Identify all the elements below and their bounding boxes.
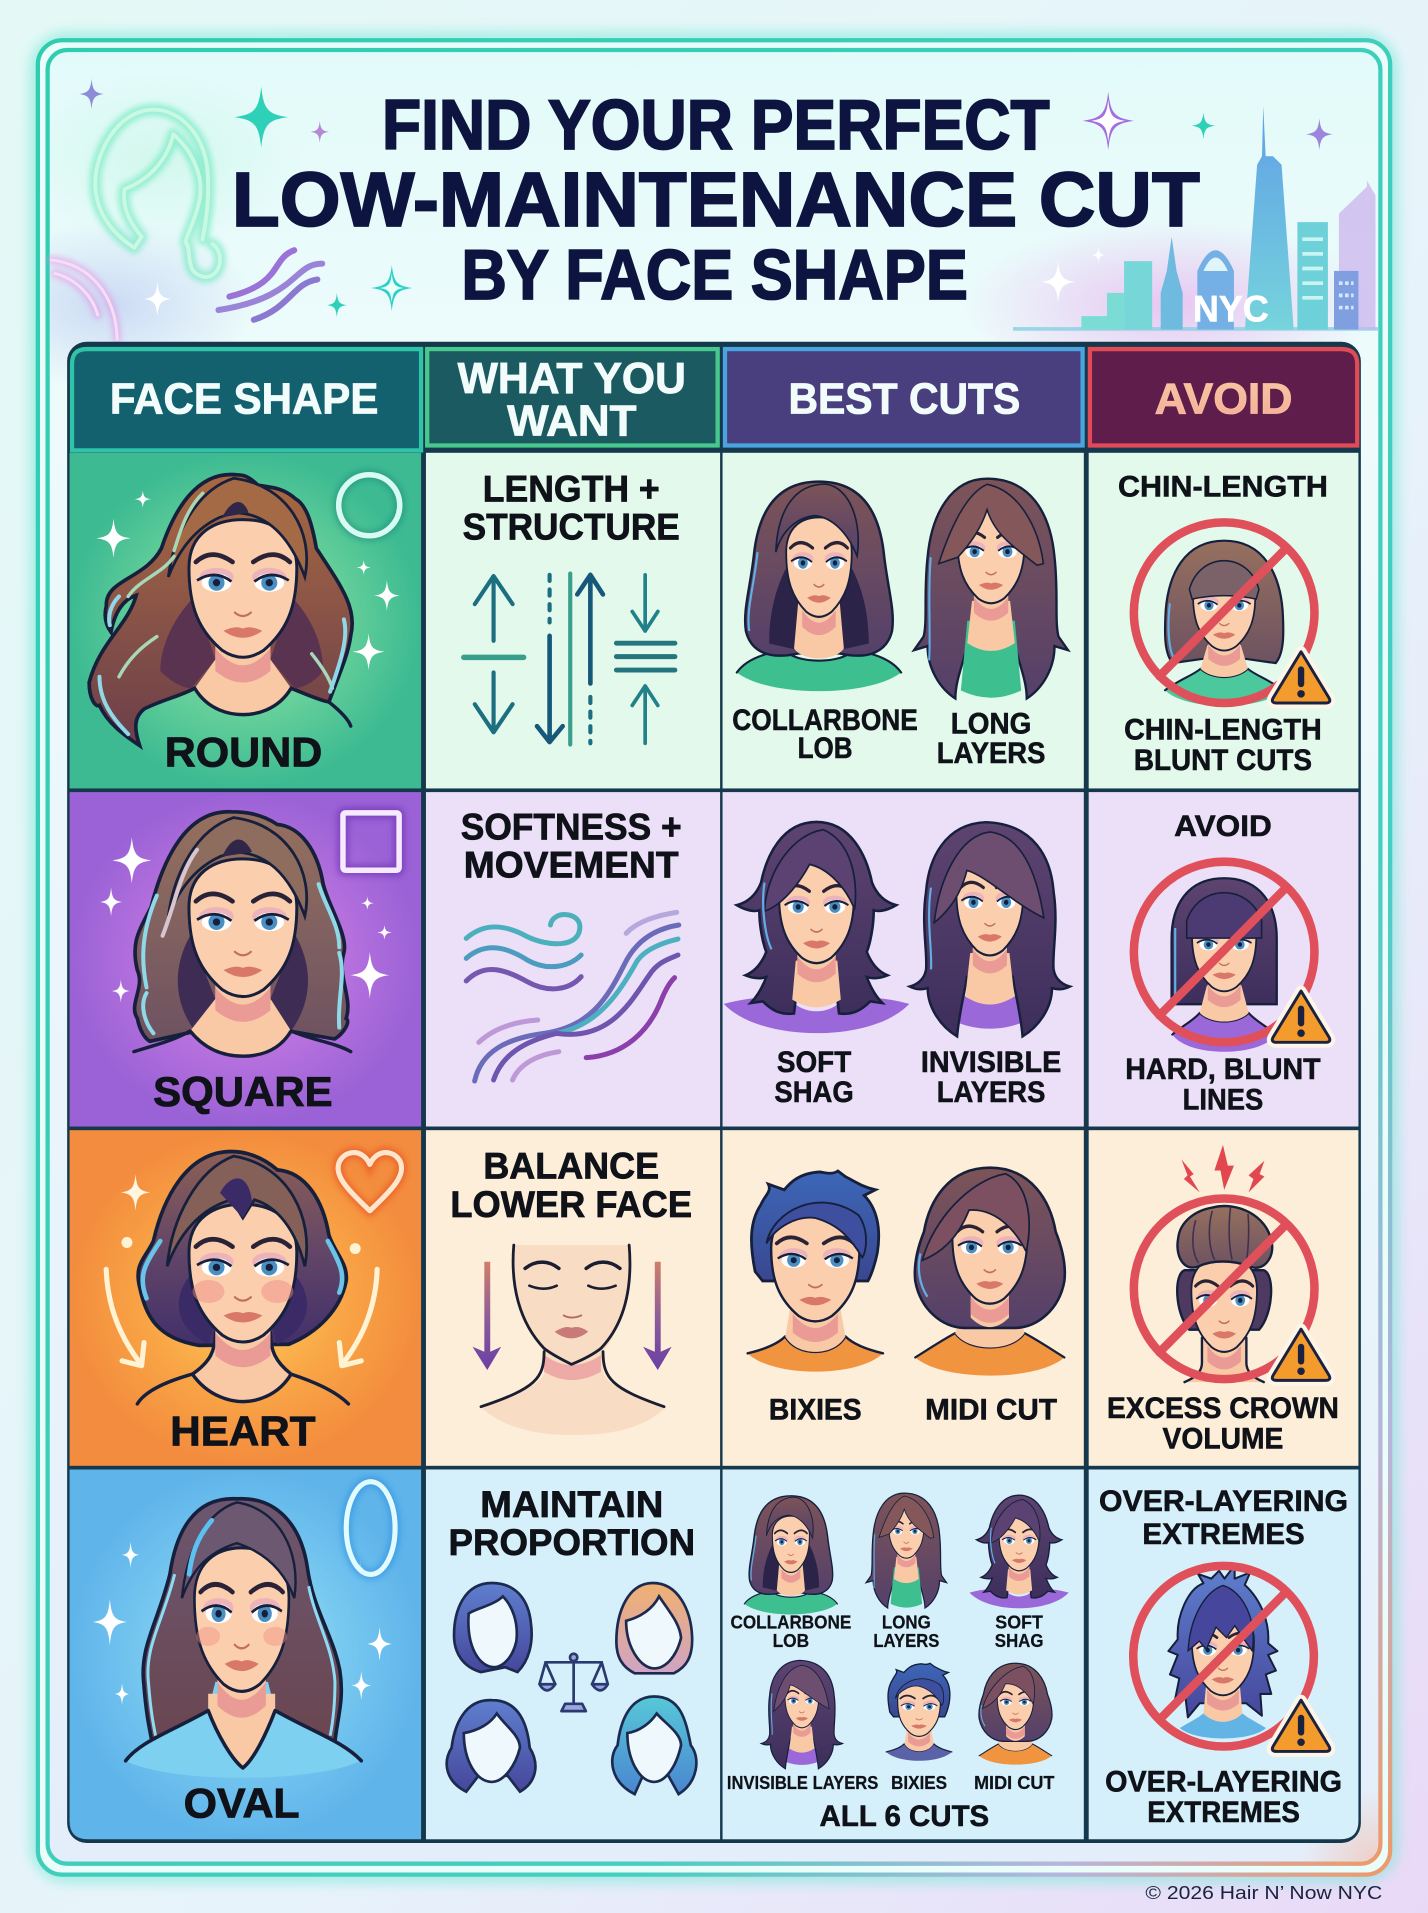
avatar: round face: [89, 474, 352, 746]
sparkles: square: [100, 837, 392, 1003]
avoid icon: hard blunt bob: [1134, 862, 1330, 1052]
avoid heading: over-layering extremes: [1099, 1485, 1348, 1551]
icon: heart shape: [338, 1153, 402, 1211]
avoid icon: over-layered shag: [1133, 1565, 1330, 1751]
icon: four silhouettes with scales: [447, 1583, 696, 1794]
labels: cut names: [727, 1612, 1055, 1793]
icon: length and structure arrows: [464, 574, 675, 745]
header: avoid: [1090, 349, 1357, 445]
cut: soft shag: [724, 822, 909, 1033]
title: [232, 85, 1200, 314]
header: best cuts: [725, 349, 1083, 445]
icon: hair wave squiggles: [218, 250, 322, 320]
table frame: [67, 342, 1361, 1843]
column 2 heading: maintain proportion: MAINTAIN: [480, 1484, 663, 1525]
avoid heading: over-layering extremes: OVER-LAYERING: [1099, 1485, 1348, 1518]
label: soft shag: SOFT: [777, 1046, 851, 1079]
label: round: ROUND: [165, 728, 322, 775]
header: what you want: WHAT YOU: [458, 354, 686, 403]
avoid heading: over-layering extremes: EXTREMES: [1142, 1518, 1305, 1551]
icon: wind swirls: [466, 912, 679, 1081]
label: bixies: BIXIES: [769, 1393, 862, 1426]
label: chin-length blunt cuts: BLUNT CUTS: [1134, 744, 1312, 777]
avatar: square face: [134, 812, 351, 1056]
cut: collarbone lob: [737, 482, 901, 691]
header: face shape: [72, 349, 421, 450]
title: LOW-MAINTENANCE CUT: [232, 157, 1200, 243]
sparkles and arrows: heart: [106, 1174, 377, 1366]
label: excess crown volume: [1107, 1392, 1339, 1456]
avoid icon: excess crown volume: [1134, 1199, 1330, 1382]
column 2 heading: length + structure: LENGTH +: [483, 469, 660, 510]
cut: midi cut: [915, 1168, 1065, 1376]
icon: circle shape: [339, 475, 400, 536]
labels: cut names: BIXIES: [891, 1772, 947, 1793]
label: all 6 cuts: ALL 6 CUTS: [820, 1800, 989, 1833]
label: soft shag: SHAG: [774, 1076, 854, 1109]
cut: invisible layers: [910, 822, 1070, 1036]
label: over-layering extremes: [1105, 1766, 1342, 1829]
icon: neon hair silhouette: [95, 110, 220, 277]
column 2 heading: balance lower face: LOWER FACE: [450, 1184, 692, 1225]
label: long layers: LONG: [951, 708, 1031, 741]
labels: cut names: LONG: [882, 1612, 931, 1633]
column 2 heading: softness + movement: MOVEMENT: [464, 845, 679, 886]
icon: square shape: [343, 813, 399, 870]
labels: cut names: COLLARBONE: [730, 1612, 851, 1633]
row 1 cells: [70, 453, 1358, 788]
row 2 cells: [70, 792, 1358, 1127]
avoid heading: chin-length: CHIN-LENGTH: [1118, 471, 1328, 504]
icon: neon pink curve: [51, 260, 117, 339]
column 2 heading: maintain proportion: [449, 1484, 695, 1563]
label: invisible layers: LAYERS: [937, 1076, 1045, 1109]
label: hard, blunt lines: HARD, BLUNT: [1125, 1053, 1321, 1086]
label: oval: OVAL: [184, 1779, 300, 1826]
labels: cut names: LAYERS: [873, 1630, 939, 1651]
cut: long layers: [914, 479, 1068, 698]
label: collarbone lob: [732, 704, 918, 765]
label: square: SQUARE: [153, 1068, 333, 1115]
labels: cut names: INVISIBLE LAYERS: [727, 1772, 878, 1793]
label: hard, blunt lines: LINES: [1183, 1083, 1263, 1116]
sparkles: header: [79, 79, 1333, 317]
cut: bixie: [748, 1171, 883, 1372]
copyright: © 2026 Hair N’ Now NYC: [1145, 1883, 1382, 1904]
label: heart: HEART: [170, 1408, 316, 1455]
column 2 heading: balance lower face: [450, 1145, 692, 1225]
label: collarbone lob: LOB: [798, 732, 853, 765]
label: invisible layers: [921, 1046, 1061, 1109]
label: excess crown volume: EXCESS CROWN: [1107, 1392, 1339, 1425]
labels: cut names: SHAG: [995, 1630, 1044, 1651]
label: invisible layers: INVISIBLE: [921, 1046, 1061, 1079]
label: collarbone lob: COLLARBONE: [732, 704, 918, 737]
avoid icon: chin-length blunt bob: [1134, 522, 1330, 706]
cuts grid: all 6 cuts: [727, 1493, 1069, 1793]
column 2 heading: balance lower face: BALANCE: [483, 1145, 659, 1186]
label: soft shag: [774, 1046, 854, 1109]
column 2 heading: softness + movement: [461, 807, 682, 886]
label: long layers: LAYERS: [937, 737, 1045, 770]
sparkles: oval: [93, 1541, 392, 1705]
avatar: heart face: [137, 1152, 348, 1404]
labels: cut names: LOB: [773, 1630, 809, 1651]
header: face shape: FACE SHAPE: [110, 375, 378, 424]
icon: oval shape: [346, 1482, 395, 1574]
labels: cut names: SOFT: [995, 1612, 1043, 1633]
label: over-layering extremes: EXTREMES: [1147, 1796, 1300, 1829]
title: BY FACE SHAPE: [461, 235, 968, 314]
header: avoid: AVOID: [1155, 375, 1293, 424]
avatar: oval face: [126, 1499, 361, 1778]
row 3 cells: [70, 1130, 1358, 1466]
header: what you want: [427, 349, 718, 446]
column 2 heading: maintain proportion: PROPORTION: [449, 1522, 695, 1563]
title: FIND YOUR PERFECT: [382, 85, 1050, 164]
avoid heading: avoid: AVOID: [1174, 810, 1272, 843]
labels: cut names: MIDI CUT: [974, 1772, 1055, 1793]
header: best cuts: BEST CUTS: [788, 375, 1020, 424]
sparkles: round: [96, 491, 400, 670]
label: long layers: [937, 708, 1045, 770]
column 2 heading: length + structure: [463, 469, 680, 547]
label: excess crown volume: VOLUME: [1163, 1423, 1283, 1456]
label: NYC: NYC: [1193, 289, 1269, 330]
header: what you want: WANT: [507, 397, 637, 446]
icon: NYC skyline: [1013, 106, 1379, 331]
column 2 heading: length + structure: STRUCTURE: [463, 506, 680, 547]
label: chin-length blunt cuts: [1124, 714, 1322, 777]
label: over-layering extremes: OVER-LAYERING: [1105, 1766, 1342, 1799]
column 2 heading: softness + movement: SOFTNESS +: [461, 807, 682, 848]
row 4 cells: [70, 1469, 1358, 1839]
label: midi cut: MIDI CUT: [925, 1393, 1057, 1426]
icon: lightning bolts: [1181, 1145, 1264, 1192]
label: hard, blunt lines: [1125, 1053, 1321, 1116]
label: chin-length blunt cuts: CHIN-LENGTH: [1124, 714, 1322, 747]
icon: balanced lower face: [473, 1245, 672, 1435]
